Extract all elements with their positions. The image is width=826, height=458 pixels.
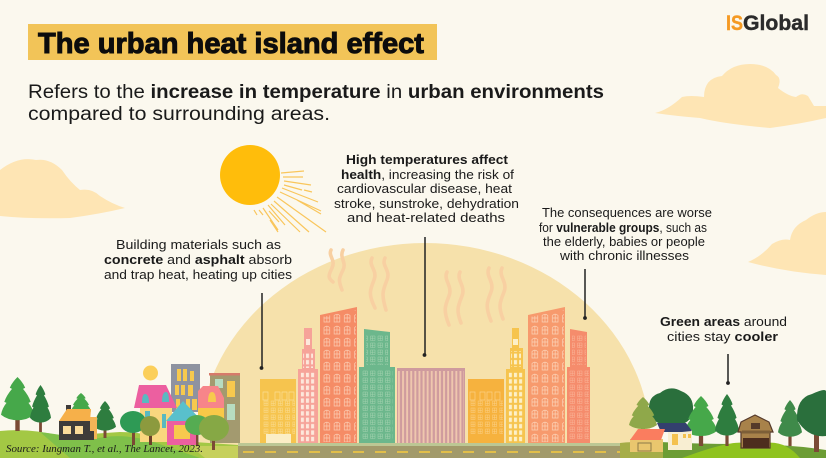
intro text: compared to surrounding areas. — [28, 104, 330, 125]
building: light orange tower — [528, 307, 565, 443]
building: amber low-rise — [468, 379, 504, 443]
logo: ISGlobal: IS — [726, 12, 743, 35]
left house — [59, 405, 97, 440]
road — [238, 443, 640, 458]
sun — [220, 145, 326, 232]
callout: health: stroke, sunstroke, dehydration — [334, 196, 519, 211]
heat dome — [199, 243, 651, 445]
callout: health: and heat-related deaths — [347, 210, 506, 225]
right houses — [630, 423, 692, 452]
callout: building materials: and trap heat, heating up cities — [104, 267, 293, 282]
small distant sun — [143, 366, 158, 380]
callout: vulnerable groups — [539, 205, 712, 320]
callout: vulnerable groups: The consequences are worse — [542, 205, 712, 220]
intro text: Refers to the increase in temperature in urban environments — [28, 82, 604, 103]
right ground — [620, 442, 826, 458]
callout: building materials: concrete and asphalt absorb — [104, 252, 292, 267]
callout: vulnerable groups: with chronic illnesses — [559, 248, 690, 263]
callout: health: cardiovascular disease, heat — [337, 181, 512, 196]
callout: vulnerable groups: for vulnerable groups, such as — [539, 220, 707, 235]
callout: health — [334, 152, 519, 357]
source note: Source: Iungman T., et al., The Lancet, 2023. — [6, 444, 203, 455]
logo: ISGlobal: Global — [743, 12, 809, 35]
building: yellow tower — [506, 328, 525, 443]
callout: green areas: Green areas around — [660, 314, 787, 329]
heat waves — [329, 250, 505, 325]
building: yellow low-rise — [260, 379, 296, 443]
callout: building materials — [104, 237, 293, 370]
left round trees — [120, 411, 229, 450]
cloud: lower right — [748, 212, 826, 275]
callout: health: health, increasing the risk of — [341, 167, 514, 182]
left town buildings — [134, 364, 240, 445]
right trees — [629, 388, 826, 452]
callout: health: High temperatures affect — [346, 152, 509, 167]
callout: vulnerable groups: the elderly, babies or people — [543, 234, 705, 249]
left trees — [1, 377, 116, 438]
cloud: top right — [655, 64, 826, 128]
intro text — [28, 82, 604, 125]
callout: green areas: cities stay cooler — [667, 329, 778, 344]
callout: green areas — [660, 314, 787, 385]
cloud: left — [0, 159, 125, 218]
building: striped mauve block — [397, 368, 465, 443]
building: coral tower — [567, 329, 590, 443]
barn — [738, 415, 773, 448]
building: green tower — [359, 329, 395, 443]
building: orange tower — [320, 307, 357, 443]
building: pink tower — [298, 328, 318, 443]
left ground — [0, 430, 238, 458]
title: The urban heat island effect — [38, 28, 424, 60]
callout: building materials: Building materials such as — [116, 237, 282, 252]
